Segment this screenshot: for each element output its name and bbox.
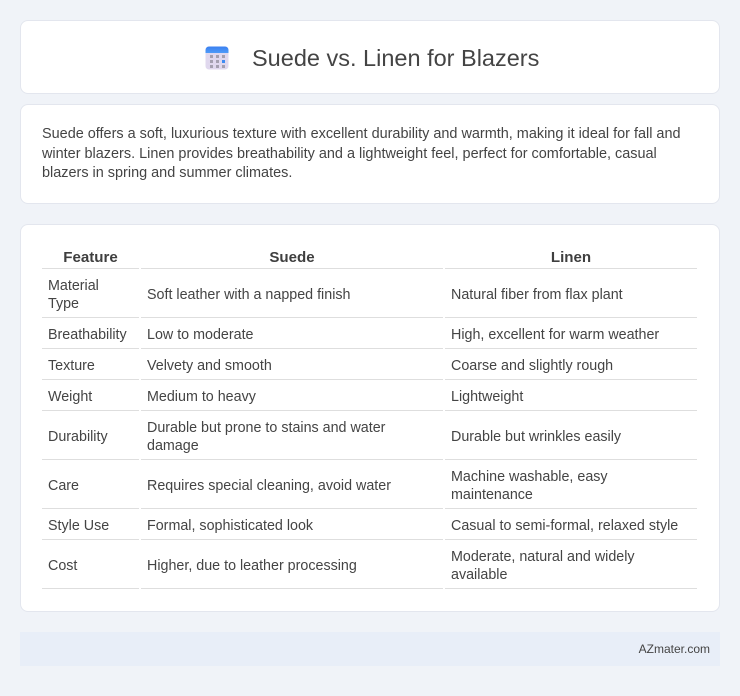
column header: Feature: Feature xyxy=(63,249,118,266)
row: Breathability xyxy=(48,327,659,343)
comparison table: Requires special cleaning, avoid water xyxy=(147,478,391,494)
table panel xyxy=(20,224,720,612)
intro text: winter blazers. Linen provides breathability and a lightweight feel, perfect for comfortable, casual xyxy=(42,146,657,162)
footer text: AZmater.com xyxy=(639,642,710,656)
comparison table: Cost xyxy=(48,558,77,574)
comparison table: Style Use xyxy=(48,518,109,534)
comparison table: Type xyxy=(48,296,79,312)
comparison table: Medium to heavy xyxy=(147,389,256,405)
comparison table: available xyxy=(451,567,507,583)
comparison table: Material xyxy=(48,278,99,294)
intro text: Suede offers a soft, luxurious texture with excellent durability and warmth, making it ideal for fall and xyxy=(42,126,681,142)
comparison table: Weight xyxy=(48,389,92,405)
comparison table: Higher, due to leather processing xyxy=(147,558,357,574)
comparison table: Machine washable, easy xyxy=(451,469,608,485)
column header: Suede: Suede xyxy=(269,249,315,266)
comparison table: Lightweight xyxy=(451,389,523,405)
header panel xyxy=(20,20,720,94)
row: Durability xyxy=(48,420,621,454)
comparison table: Durability xyxy=(48,429,108,445)
comparison table: Durable but prone to stains and water xyxy=(147,420,385,436)
row: Weight xyxy=(48,389,524,405)
intro text: blazers in spring and summer climates. xyxy=(42,165,292,181)
comparison table: High, excellent for warm weather xyxy=(451,327,659,343)
comparison table: Soft leather with a napped finish xyxy=(147,287,350,303)
comparison table: Velvety and smooth xyxy=(147,358,272,374)
row: Material Type xyxy=(48,278,623,312)
comparison table: Texture xyxy=(48,358,95,374)
footer bar xyxy=(20,632,720,666)
comparison table: Natural fiber from flax plant xyxy=(451,287,623,303)
comparison table: Moderate, natural and widely xyxy=(451,549,635,565)
title: Suede vs. Linen for Blazers xyxy=(252,45,539,71)
intro text xyxy=(42,126,681,181)
comparison table: Casual to semi-formal, relaxed style xyxy=(451,518,678,534)
comparison table: Coarse and slightly rough xyxy=(451,358,613,374)
row: Cost xyxy=(48,549,635,583)
comparison table: Breathability xyxy=(48,327,127,343)
comparison table: Durable but wrinkles easily xyxy=(451,429,621,445)
intro panel xyxy=(20,104,720,204)
comparison table: Low to moderate xyxy=(147,327,254,343)
comparison table: Formal, sophisticated look xyxy=(147,518,313,534)
comparison table: maintenance xyxy=(451,487,533,503)
comparison table: Care xyxy=(48,478,79,494)
column header: Linen: Linen xyxy=(551,249,591,266)
row: Care xyxy=(48,469,608,503)
row: Style Use xyxy=(48,518,678,534)
comparison table: damage xyxy=(147,438,199,454)
row: Texture xyxy=(48,358,613,374)
icon: calendar xyxy=(206,46,228,70)
